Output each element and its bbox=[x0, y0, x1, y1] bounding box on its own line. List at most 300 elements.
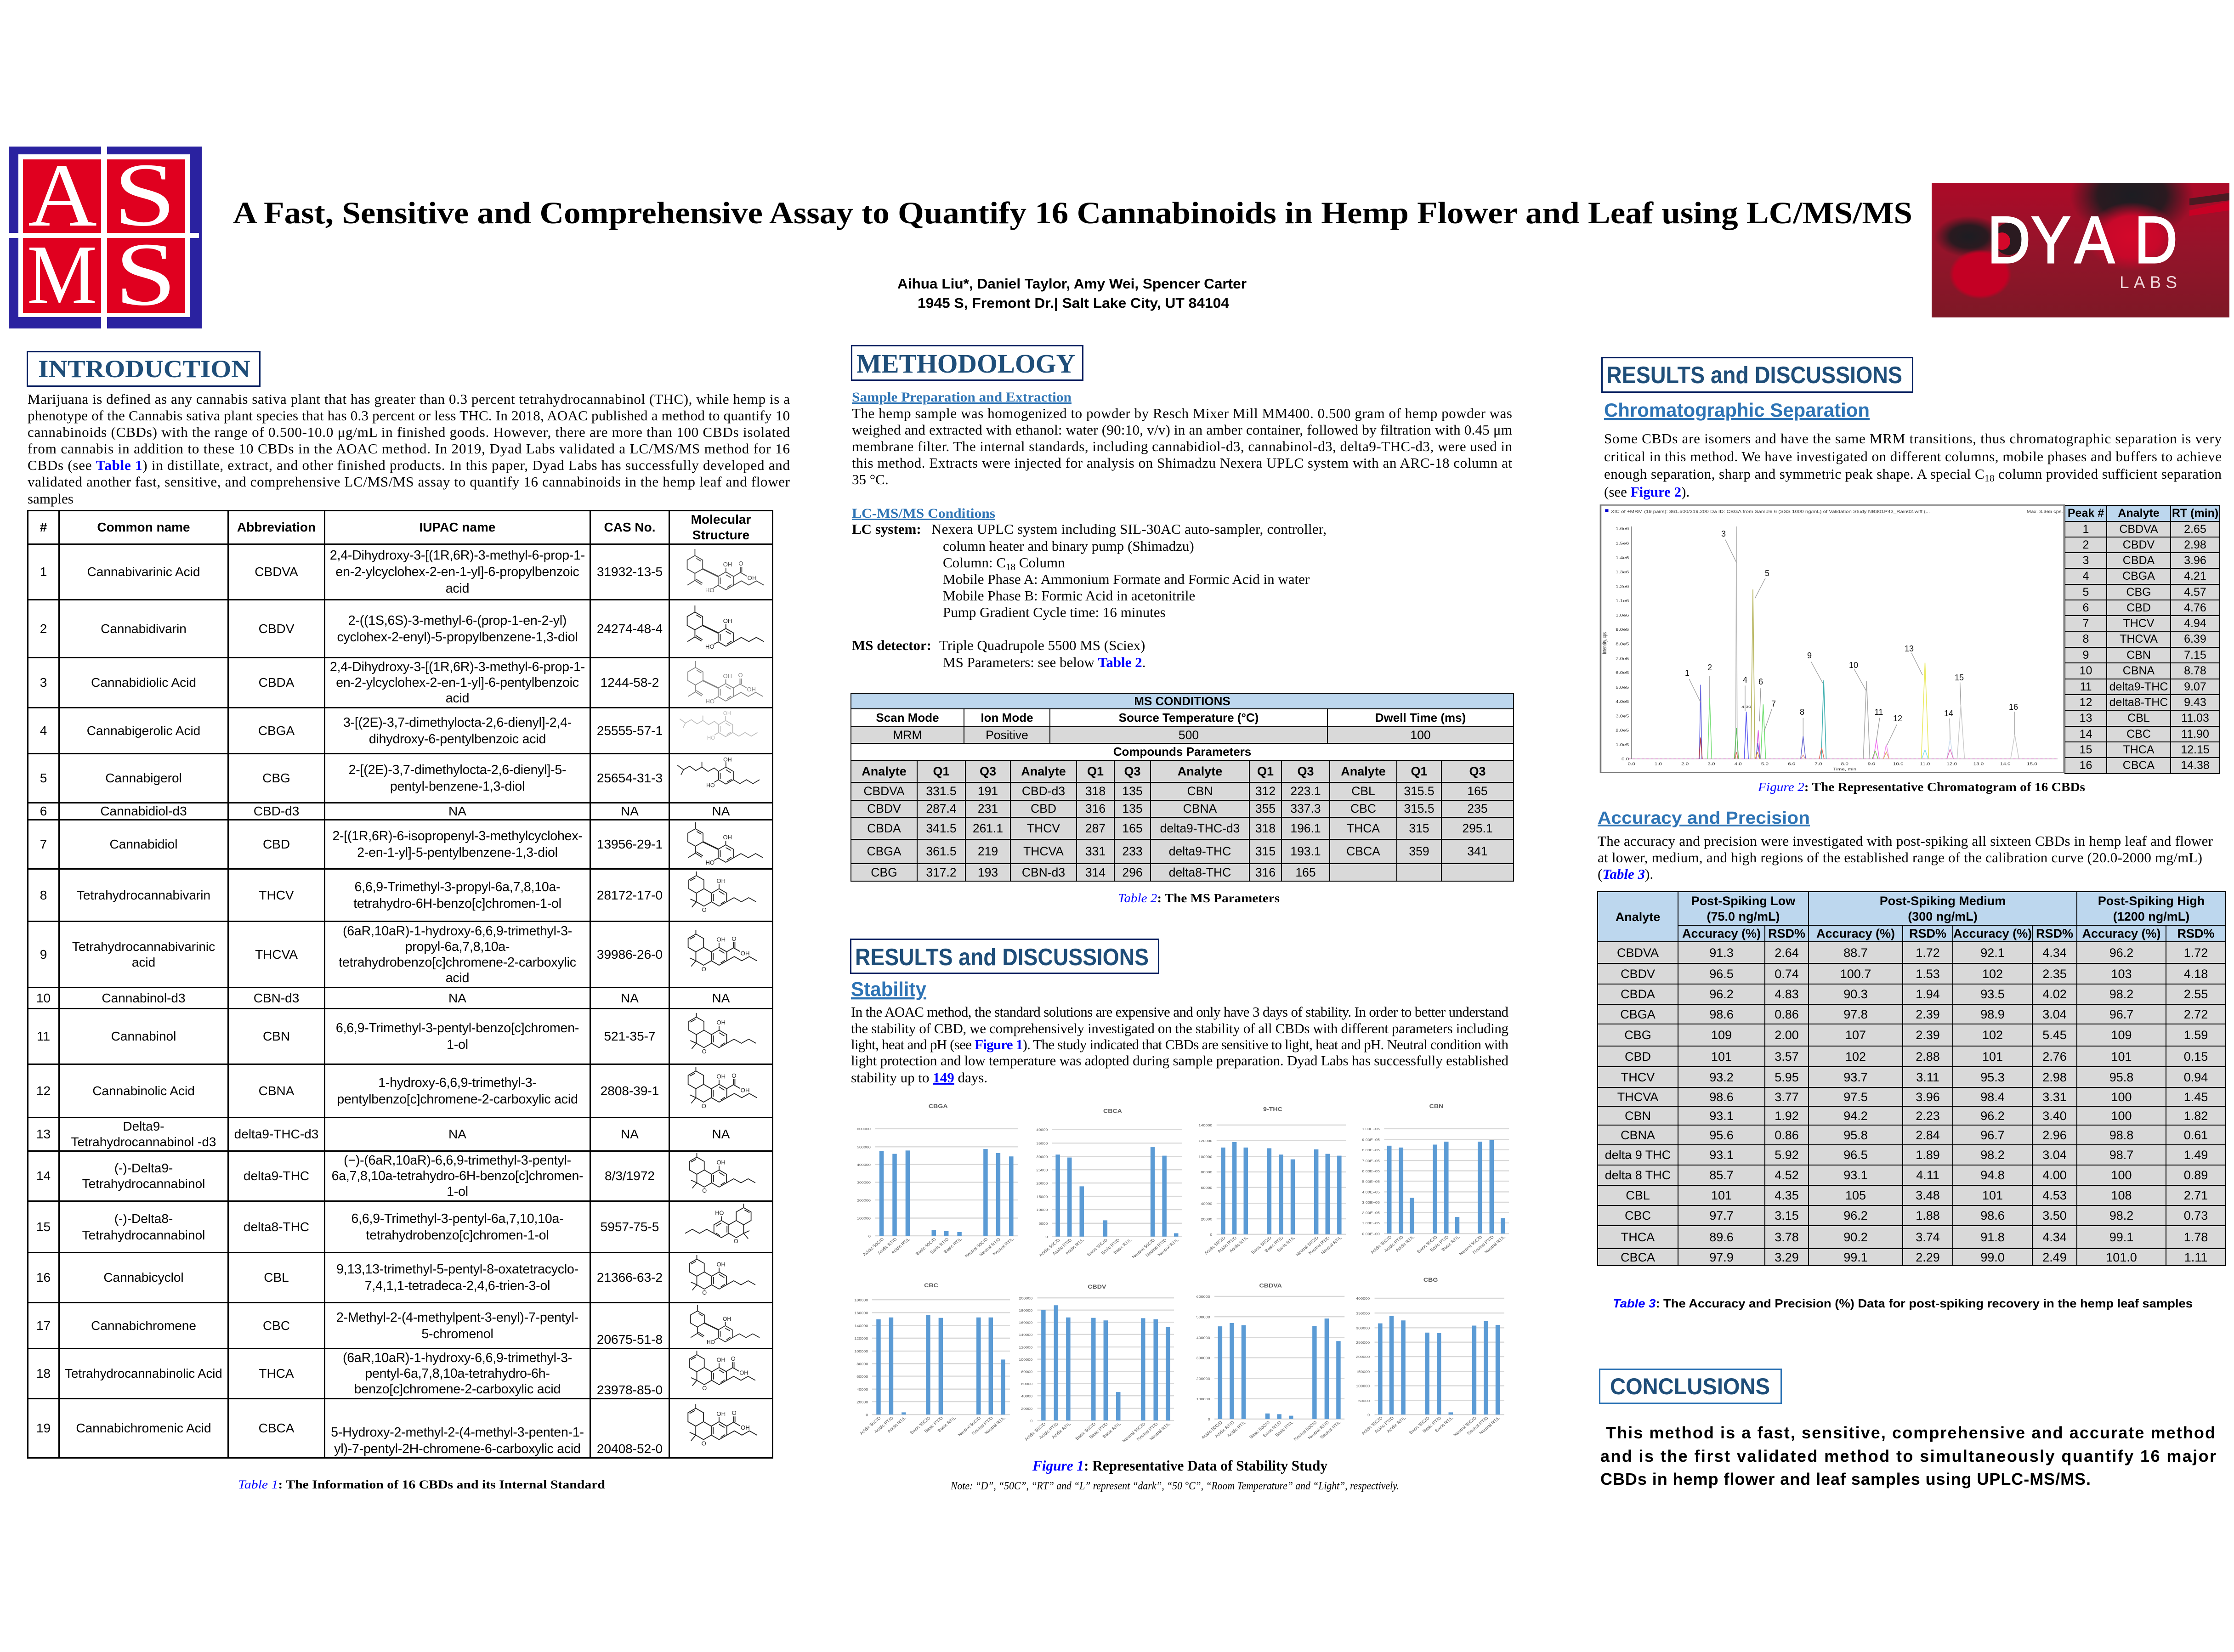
table 3: accuracy and precision: 98.8 bbox=[2109, 1128, 2133, 1142]
table: peak list: 11.03 bbox=[2181, 712, 2209, 724]
peak number labels: 5 bbox=[1765, 569, 1769, 578]
bar chart: CBDV: 160000 bbox=[1019, 1320, 1033, 1324]
bar chart: CBC: Basic RT/D bbox=[924, 1416, 944, 1434]
bar chart: CBDV: Neutral RT/L bbox=[1149, 1422, 1172, 1441]
table 3: accuracy and precision: 105 bbox=[1845, 1188, 1866, 1202]
peak number labels: 2 bbox=[1707, 663, 1712, 672]
table 1: cannabinoid information: 25555-57-1 bbox=[597, 723, 663, 738]
table 2: MS parameters: CBN bbox=[1187, 784, 1213, 798]
table 1: cannabinoid information: CBD bbox=[263, 837, 290, 851]
table 1: cannabinoid information: tetrahydro-6H-benzo[c]chromen-1-ol bbox=[353, 896, 561, 911]
subheading: Chromatographic Separation: Chromatographic Separation bbox=[1604, 399, 1870, 421]
bar chart: CBGA: 600000 bbox=[857, 1127, 871, 1131]
table 3: accuracy and precision: 0.15 bbox=[2184, 1049, 2208, 1063]
table 3: accuracy and precision: 2.00 bbox=[1775, 1028, 1799, 1042]
table 3: accuracy and precision: 2.71 bbox=[2184, 1188, 2208, 1202]
text block: accuracy and precision: The accuracy and precision were investigated with post-spiking all sixteen CBDs in hemp leaf and flower bbox=[1598, 833, 2213, 849]
bar chart: 9-THC: 0 bbox=[1210, 1233, 1213, 1237]
table 3: accuracy and precision: 93.2 bbox=[1709, 1070, 1734, 1084]
table: peak list: 4.57 bbox=[2184, 585, 2206, 598]
text block: LC and MS conditions: MS Parameters: see below Table 2. bbox=[943, 654, 1145, 670]
bar chart: CBDVA: 100000 bbox=[1196, 1397, 1210, 1401]
subheading: sample preparation: Sample Preparation and Extraction bbox=[852, 390, 1072, 405]
peak number labels: 1 bbox=[1685, 668, 1690, 678]
table 3: accuracy and precision: 1.49 bbox=[2184, 1148, 2208, 1162]
table 1: cannabinoid information: CBCA bbox=[259, 1421, 294, 1435]
bar chart: CBGA: Acidic 50C/D bbox=[862, 1237, 885, 1257]
text block: accuracy and precision: at lower, medium, and high regions of the established range of the calibration curve (20.0-2000 mg/mL) bbox=[1598, 849, 2202, 866]
bar chart: 9-THC: Neutral RT/L bbox=[1320, 1235, 1343, 1255]
table 2: MS parameters: MS CONDITIONS bbox=[1134, 694, 1230, 707]
table: peak list: delta8-THC bbox=[2109, 696, 2168, 708]
table 3: accuracy and precision: 0.86 bbox=[1775, 1007, 1799, 1021]
caption: table 2: Table 2: The MS Parameters bbox=[1118, 891, 1280, 905]
icon: molecule CBDVA bbox=[687, 549, 764, 594]
peak number labels: 3 bbox=[1721, 529, 1726, 538]
table 3: accuracy and precision: 95.3 bbox=[1980, 1070, 2005, 1084]
table 1: cannabinoid information: Tetrahydrocannabinol bbox=[82, 1177, 205, 1191]
x axis tick labels bbox=[1602, 632, 2037, 771]
x axis tick labels: Time, min bbox=[1833, 767, 1856, 771]
bar chart: CBCA: Acidic 50C/D bbox=[1038, 1238, 1061, 1258]
bar chart: CBDV: 140000 bbox=[1019, 1333, 1033, 1337]
table 2: MS parameters: CBDVA bbox=[863, 784, 905, 798]
table 1: cannabinoid information: 2-[(1R,6R)-6-isopropenyl-3-methylcyclohex- bbox=[332, 829, 583, 843]
table 3: accuracy and precision: 98.2 bbox=[2109, 987, 2133, 1001]
bar chart: CBCA: Neutral RT/D bbox=[1145, 1238, 1168, 1258]
bar chart: 9-THC: 100000 bbox=[1198, 1154, 1213, 1159]
table: peak list: 12 bbox=[2080, 696, 2092, 708]
text block: chromatographic separation: column provided sufficient separation bbox=[1995, 466, 2222, 482]
table 1: cannabinoid information: 23978-85-0 bbox=[597, 1383, 663, 1397]
table 3: accuracy and precision: 3.77 bbox=[1775, 1090, 1799, 1103]
authors and affiliation: Aihua Liu*, Daniel Taylor, Amy Wei, Spencer Carter bbox=[897, 276, 1247, 292]
table 2: MS parameters: 341 bbox=[1467, 844, 1488, 858]
table 1: cannabinoid information: tetrahydrobenzo[c]chromen-1-ol bbox=[366, 1228, 549, 1242]
table 2: MS parameters: THCVA bbox=[1023, 844, 1064, 858]
table 2: MS parameters: CBN-d3 bbox=[1022, 866, 1065, 879]
table: peak list: CBCA bbox=[2123, 759, 2155, 772]
table 3: accuracy and precision: 1.72 bbox=[1916, 945, 1940, 959]
table 1: cannabinoid information: 2808-39-1 bbox=[601, 1083, 659, 1098]
bar chart: CBN: 3.00E+05 bbox=[1362, 1200, 1380, 1205]
heading: Conclusions: CONCLUSIONS bbox=[1610, 1374, 1770, 1399]
icon: molecule CBC bbox=[691, 1305, 760, 1345]
table 2: MS parameters: 314 bbox=[1085, 866, 1106, 879]
bar chart: CBDVA: 400000 bbox=[1196, 1335, 1210, 1340]
heading: Introduction bbox=[28, 352, 260, 386]
bar chart: CBDV: 0 bbox=[1030, 1419, 1033, 1423]
table 3: accuracy and precision: 98.7 bbox=[2109, 1148, 2133, 1162]
table: peak list: 4 bbox=[2083, 570, 2089, 583]
table 2: MS parameters: MRM bbox=[893, 728, 922, 741]
table 3: accuracy and precision: 5.92 bbox=[1775, 1148, 1799, 1162]
icon: molecule delta9-THC bbox=[689, 1153, 755, 1194]
bar chart: CBG: 100000 bbox=[1356, 1384, 1370, 1388]
icon: molecule THCA bbox=[689, 1351, 755, 1392]
x axis tick labels: 6.0 bbox=[1788, 762, 1796, 766]
bar chart: CBC: Neutral RT/L bbox=[984, 1416, 1007, 1436]
table 3: accuracy and precision: 93.1 bbox=[1709, 1109, 1734, 1123]
bar chart: CBGA: Acidic RT/D bbox=[877, 1237, 898, 1256]
table 1: cannabinoid information: CBGA bbox=[258, 723, 295, 738]
table: peak list: 13 bbox=[2080, 712, 2092, 724]
table 3: accuracy and precision: 3.40 bbox=[2042, 1109, 2067, 1123]
table 1: cannabinoid information: Cannabichromenic Acid bbox=[76, 1421, 211, 1435]
table 1: cannabinoid information: 2-Methyl-2-(4-methylpent-3-enyl)-7-pentyl- bbox=[336, 1310, 578, 1325]
table: peak list: 3 bbox=[2083, 554, 2089, 567]
table 3: accuracy and precision: 95.8 bbox=[2109, 1070, 2133, 1084]
table 1: cannabinoid information: pentylbenzo[c]chromene-2-carboxylic acid bbox=[337, 1092, 578, 1106]
table 3: accuracy and precision: 102 bbox=[1982, 967, 2003, 980]
table 3: accuracy and precision: 2.72 bbox=[2184, 1007, 2208, 1021]
y axis tick labels: 1.0e5 bbox=[1616, 743, 1629, 747]
bar chart: 9-THC: Acidic RT/D bbox=[1216, 1236, 1238, 1254]
table 2: MS parameters: Analyte bbox=[1341, 764, 1386, 778]
table 2: MS parameters: 316 bbox=[1255, 866, 1276, 879]
bar chart: CBC: 120000 bbox=[854, 1336, 868, 1341]
bar chart: CBCA bbox=[1036, 1108, 1182, 1259]
table: peak list: 8 bbox=[2083, 633, 2089, 645]
table: peak list: 12.15 bbox=[2181, 743, 2210, 756]
table 2: MS parameters: 315.5 bbox=[1404, 784, 1435, 798]
bar chart: CBG: 150000 bbox=[1356, 1369, 1370, 1374]
table: peak list: THCV bbox=[2123, 617, 2155, 629]
table 1: cannabinoid information: CBD-d3 bbox=[254, 804, 299, 818]
bar chart: CBN: 6.00E+05 bbox=[1362, 1169, 1380, 1173]
table 2: MS parameters: CBC bbox=[1350, 802, 1376, 815]
table 1: cannabinoid information: NA bbox=[448, 804, 466, 818]
bar chart: CBDV: 100000 bbox=[1019, 1358, 1033, 1362]
table 1: cannabinoid information: delta8-THC bbox=[244, 1219, 309, 1234]
bar chart: CBCA: Basic RT/D bbox=[1100, 1238, 1121, 1256]
x axis tick labels: 11.0 bbox=[1920, 762, 1930, 766]
table 2: MS parameters: Analyte bbox=[862, 764, 907, 778]
table 2: MS parameters: CBNA bbox=[1183, 802, 1217, 815]
bar chart: CBDVA: Acidic RT/D bbox=[1214, 1420, 1236, 1439]
table 1: cannabinoid information: CBG bbox=[262, 771, 290, 785]
table 2: MS parameters: CBDV bbox=[867, 802, 901, 815]
bar chart: CBGA: 0 bbox=[868, 1234, 871, 1238]
peak number labels bbox=[1685, 529, 2018, 723]
table: peak list: CBGA bbox=[2122, 570, 2155, 583]
table 1: cannabinoid information: pentyl-6a,7,8,10a-tetrahydro-6h- bbox=[365, 1366, 550, 1381]
table 1: cannabinoid information: CBN bbox=[263, 1029, 290, 1043]
bar chart: CBN: Acidic RT/D bbox=[1383, 1235, 1405, 1253]
peak number labels: 8 bbox=[1800, 707, 1804, 717]
table 3: accuracy and precision: 102 bbox=[1982, 1028, 2003, 1042]
table 3: accuracy and precision: 1.94 bbox=[1916, 987, 1940, 1001]
table 3: accuracy and precision: 4.52 bbox=[1775, 1168, 1799, 1182]
table 1: cannabinoid information: 5 bbox=[40, 771, 47, 785]
table 3: accuracy and precision: CBD bbox=[1625, 1049, 1651, 1063]
table 1: cannabinoid information: 9 bbox=[40, 947, 47, 961]
table 3: accuracy and precision: 4.83 bbox=[1775, 987, 1799, 1001]
table 1: cannabinoid information: 2,4-Dihydroxy-3-[(1R,6R)-3-methyl-6-prop-1- bbox=[330, 660, 585, 674]
text block: LC and MS conditions: Column bbox=[1015, 554, 1065, 571]
table: peak list: 10 bbox=[2080, 664, 2092, 677]
bar chart: CBC: 0 bbox=[866, 1413, 868, 1417]
text block: conclusions: This method is a fast, sensitive, comprehensive and accurate method bbox=[1606, 1423, 2215, 1442]
table 1: cannabinoid information: 24274-48-4 bbox=[597, 621, 663, 636]
table 1: cannabinoid information: THCV bbox=[259, 888, 294, 902]
bar chart: CBDV: Neutral RT/D bbox=[1136, 1422, 1159, 1442]
peak number labels: 12 bbox=[1893, 714, 1902, 723]
table: peak list: CBG bbox=[2126, 585, 2151, 598]
table 3: accuracy and precision: 96.5 bbox=[1843, 1148, 1868, 1162]
bar chart: CBGA: Basic RT/D bbox=[929, 1237, 950, 1255]
table 1: cannabinoid information: Structure bbox=[692, 528, 749, 542]
table 1: cannabinoid information: 25654-31-3 bbox=[597, 771, 663, 785]
table 3: accuracy and precision: 108 bbox=[2111, 1188, 2132, 1202]
table 3: accuracy and precision: 97.7 bbox=[1709, 1209, 1734, 1222]
bar chart: CBGA: Acidic RT/L bbox=[890, 1237, 912, 1255]
icon: molecule CBNA bbox=[688, 1067, 757, 1109]
table 3: accuracy and precision: 96.7 bbox=[2109, 1007, 2133, 1021]
table 3: accuracy and precision: CBL bbox=[1626, 1188, 1650, 1202]
table: peak list: 4.21 bbox=[2184, 570, 2206, 583]
table 2: MS parameters: Q3 bbox=[1469, 764, 1486, 778]
table 3: accuracy and precision: 94.8 bbox=[1980, 1168, 2005, 1182]
bar chart: CBDV: Basic RT/L bbox=[1101, 1422, 1122, 1439]
table 3: accuracy and precision: 0.74 bbox=[1775, 967, 1799, 980]
bar chart: CBDVA: Acidic 50C/D bbox=[1200, 1420, 1224, 1440]
table: peak list: THCA bbox=[2123, 743, 2155, 756]
table 1: cannabinoid information: 21366-63-2 bbox=[597, 1270, 663, 1284]
text block: introduction: from cannabis in addition to these 10 CBDs in the AOAC method. In 2019, Dyad Labs validated a LC/MS/MS method for 16 bbox=[28, 441, 790, 457]
table 1: cannabinoid information: 2 bbox=[40, 621, 47, 636]
bar chart: CBGA: 500000 bbox=[857, 1145, 871, 1149]
table 3: accuracy and precision: 101 bbox=[1982, 1049, 2003, 1063]
table 3: accuracy and precision: 2.39 bbox=[1916, 1028, 1940, 1042]
table: peak list: CBDV bbox=[2123, 538, 2155, 551]
y axis tick labels: 7.0e5 bbox=[1616, 657, 1629, 661]
table 1: cannabinoid information: CBN-d3 bbox=[254, 990, 299, 1005]
table 3: accuracy and precision: 4.11 bbox=[1916, 1168, 1939, 1182]
table 3: accuracy and precision: Accuracy (%) bbox=[1816, 927, 1895, 940]
caption: figure 2: Figure 2 : The Representative Chromatogram of 16 CBDs bbox=[1758, 780, 2085, 794]
table 1: cannabinoid information: 13 bbox=[36, 1127, 51, 1141]
bar chart: CBDV: Acidic RT/D bbox=[1038, 1422, 1060, 1440]
table: peak list: 14 bbox=[2080, 728, 2092, 741]
bar chart: 9-THC bbox=[1198, 1106, 1346, 1257]
text block: LC and MS conditions: Nexera UPLC system including SIL-30AC auto-sampler, controller, bbox=[931, 521, 1327, 537]
table 3: accuracy and precision: 101 bbox=[1711, 1049, 1732, 1063]
table 3: accuracy and precision: RSD% bbox=[1768, 927, 1805, 940]
table 2: MS parameters: Analyte bbox=[1021, 764, 1066, 778]
table 2: MS parameters: 312 bbox=[1255, 784, 1276, 798]
table 3: accuracy and precision: 0.89 bbox=[2184, 1168, 2208, 1182]
table 3: accuracy and precision: CBDV bbox=[1621, 967, 1655, 980]
text block: conclusions: CBDs in hemp flower and leaf samples using UPLC-MS/MS. bbox=[1600, 1470, 2091, 1488]
table 3: accuracy and precision: 2.49 bbox=[2042, 1250, 2067, 1264]
table 3: accuracy and precision: 4.53 bbox=[2042, 1188, 2067, 1202]
table 1: cannabinoid information: 20408-52-0 bbox=[597, 1442, 663, 1456]
table 2: MS parameters: 318 bbox=[1255, 821, 1276, 835]
bar chart: CBCA: 35000 bbox=[1036, 1141, 1048, 1145]
table 3: accuracy and precision: 4.34 bbox=[2042, 945, 2067, 959]
bar chart: CBGA: CBGA bbox=[929, 1103, 948, 1109]
y axis tick labels: 1.5e6 bbox=[1616, 542, 1629, 546]
table 1: cannabinoid information: 14 bbox=[36, 1169, 51, 1183]
table 3: accuracy and precision: 98.2 bbox=[2109, 1209, 2133, 1222]
table 2: MS parameters: CBDA bbox=[867, 821, 901, 835]
icon: molecule CBCA bbox=[688, 1404, 757, 1447]
authors and affiliation: 1945 S, Fremont Dr.| Salt Lake City, UT 84104 bbox=[918, 295, 1230, 311]
table 3: accuracy and precision: RSD% bbox=[2177, 927, 2215, 940]
bar chart: CBCA: 30000 bbox=[1036, 1154, 1048, 1159]
table 3: accuracy and precision: 100 bbox=[2111, 1090, 2132, 1103]
figure 2: chromatogram: XIC of +MRM (19 pairs): 361.500/219.200 Da ID: CBGA from Sample 6 (SSS 1000 ng/mL) of Validation Study NB301P42_Rain02.wiff (... bbox=[1611, 509, 1930, 514]
bar chart: CBGA: Basic RT/L bbox=[943, 1237, 964, 1255]
text block: chromatographic separation: (see Figure 2). bbox=[1604, 484, 1690, 500]
bar chart: 9-THC: 60000 bbox=[1201, 1186, 1213, 1190]
bar chart: CBN: Neutral RT/D bbox=[1472, 1235, 1495, 1255]
bar chart: CBDV: Neutral 50C/D bbox=[1122, 1422, 1147, 1443]
table 3: accuracy and precision: 2.23 bbox=[1916, 1109, 1940, 1123]
table 3: accuracy and precision: 109 bbox=[1711, 1028, 1732, 1042]
table 1: cannabinoid information: 7,4,1,1-tetradeca-2,4,6-trien-3-ol bbox=[365, 1279, 550, 1293]
table 1: cannabinoid information: (−)-(6aR,10aR)-6,6,9-trimethyl-3-pentyl- bbox=[344, 1153, 571, 1168]
table 1: cannabinoid information: en-2-ylcyclohex-2-en-1-yl]-6-pentylbenzoic bbox=[336, 675, 579, 690]
logo: Dyad Labs: LABS bbox=[2120, 273, 2177, 292]
text block: introduction: phenotype of the Cannabis sativa plant species that has 0.3 percent or less THC. In 2018, AOAC published a method to quantify 10 bbox=[28, 407, 790, 424]
table 3: accuracy and precision: 101 bbox=[2111, 1049, 2132, 1063]
table 2: MS parameters: 315 bbox=[1255, 844, 1276, 858]
bar chart: CBCA: 10000 bbox=[1036, 1208, 1048, 1212]
bar chart: CBDVA: Basic 50C/D bbox=[1248, 1420, 1271, 1440]
icon: molecule CBDA bbox=[688, 661, 763, 705]
caption: table 1: Table 1 : The Information of 16 CBDs and its Internal Standard bbox=[238, 1478, 606, 1491]
table 3: accuracy and precision: 96.2 bbox=[2109, 945, 2133, 959]
table 2: MS parameters: Scan Mode bbox=[876, 711, 939, 724]
table: peak list: CBD bbox=[2126, 601, 2151, 614]
bar chart: 9-THC: Neutral RT/D bbox=[1308, 1236, 1331, 1256]
table 2: MS parameters: 219 bbox=[978, 844, 998, 858]
table 3: accuracy and precision: 96.2 bbox=[1709, 987, 1734, 1001]
bar chart: CBN: Basic RT/D bbox=[1429, 1235, 1450, 1253]
bar chart: CBG: 200000 bbox=[1356, 1355, 1370, 1359]
table 1: cannabinoid information: Cannabidiol bbox=[110, 837, 177, 851]
table 1: cannabinoid information: Cannabidiolic Acid bbox=[91, 675, 196, 690]
icon: molecule CBGA bbox=[680, 711, 757, 741]
bar chart: CBC: 80000 bbox=[856, 1362, 868, 1366]
bar chart: CBDV: CBDV bbox=[1088, 1284, 1106, 1290]
table 1: cannabinoid information: Tetrahydrocannabivarin bbox=[77, 888, 210, 902]
table 3: accuracy and precision: 0.73 bbox=[2184, 1209, 2208, 1222]
x axis tick labels: 1.0 bbox=[1655, 762, 1662, 766]
text block: stability: light protection and low temperature was adopted during sample preparation. Dyad Labs has successfully established bbox=[851, 1052, 1509, 1069]
y axis tick labels: 6.0e5 bbox=[1616, 671, 1629, 675]
heading: Introduction: INTRODUCTION bbox=[38, 355, 250, 383]
bar chart: CBC: 20000 bbox=[856, 1400, 868, 1404]
bar chart: CBDVA: Neutral RT/L bbox=[1319, 1420, 1342, 1440]
peak number labels: 9 bbox=[1807, 651, 1812, 660]
logo: ASMS: A bbox=[28, 145, 97, 245]
table 3: accuracy and precision: Post-Spiking Low bbox=[1691, 894, 1795, 908]
text block: introduction: cannabinoids (CBDs) with the range of 0.500-10.0 μg/mL in finished goods. However, there are more than 100 CBDs isolated bbox=[28, 424, 790, 440]
table 1: cannabinoid information: 11 bbox=[37, 1029, 50, 1043]
table 2: MS parameters: 331.5 bbox=[926, 784, 957, 798]
table 2: MS parameters: 355 bbox=[1255, 802, 1276, 815]
table 2: MS parameters: Q3 bbox=[1124, 764, 1141, 778]
bar chart: CBCA: 0 bbox=[1045, 1235, 1048, 1239]
table: peak list: delta9-THC bbox=[2109, 680, 2168, 693]
bar chart: CBDV: 60000 bbox=[1021, 1382, 1033, 1386]
table 1: cannabinoid information: acid bbox=[132, 955, 155, 969]
table 1: cannabinoid information: 17 bbox=[36, 1318, 51, 1332]
table 1: cannabinoid information: 6a,7,8,10a-tetrahydro-6H-benzo[c]chromen- bbox=[332, 1169, 583, 1183]
bar chart: CBDV: 120000 bbox=[1019, 1345, 1033, 1349]
table 2: MS parameters: delta9-THC-d3 bbox=[1160, 821, 1240, 835]
peak number labels: 13 bbox=[1905, 644, 1914, 653]
table 3: accuracy and precision: 3.11 bbox=[1916, 1070, 1939, 1084]
bar chart: CBCA: Acidic RT/L bbox=[1064, 1238, 1086, 1256]
bar chart: CBCA: Neutral RT/L bbox=[1157, 1238, 1180, 1257]
table 2: MS parameters bbox=[851, 693, 1513, 881]
x axis tick labels: 9.0 bbox=[1868, 762, 1876, 766]
bar chart: CBG: 400000 bbox=[1356, 1296, 1370, 1301]
table 1: cannabinoid information: Cannabinolic Acid bbox=[92, 1083, 195, 1098]
y axis tick labels bbox=[1616, 527, 1629, 762]
bar chart: CBCA: 25000 bbox=[1036, 1168, 1048, 1172]
table 2: MS parameters: 337.3 bbox=[1290, 802, 1321, 815]
bar chart: CBC: 100000 bbox=[854, 1349, 868, 1353]
table 1: cannabinoid information: 521-35-7 bbox=[604, 1029, 656, 1043]
table 3: accuracy and precision: 99.0 bbox=[1980, 1250, 2005, 1264]
subheading: Stability: Stability bbox=[851, 978, 926, 1001]
table 1: cannabinoid information: (-)-Delta9- bbox=[114, 1161, 173, 1175]
figure 2: chromatogram: 4.30 bbox=[1741, 705, 1751, 709]
table 1: cannabinoid information: 5-Hydroxy-2-methyl-2-(4-methyl-3-penten-1- bbox=[331, 1425, 584, 1440]
table 2: MS parameters: Q1 bbox=[1087, 764, 1104, 778]
table: peak list: 11 bbox=[2080, 680, 2092, 693]
peak number labels: 10 bbox=[1849, 661, 1858, 670]
text block: chromatographic separation: critical in this method. We have investigated on different columns, mobile phases and buffers to achieve bbox=[1604, 448, 2222, 464]
bar chart: CBDV: Acidic RT/L bbox=[1051, 1422, 1072, 1440]
bar chart: CBC: Acidic RT/L bbox=[886, 1416, 907, 1434]
table 1: cannabinoid information: NA bbox=[621, 1127, 639, 1141]
bar chart: CBDV: Basic RT/D bbox=[1089, 1422, 1109, 1440]
bar chart: CBDVA: Neutral RT/D bbox=[1307, 1420, 1330, 1440]
table 3: accuracy and precision: 97.9 bbox=[1709, 1250, 1734, 1264]
table 1: cannabinoid information: (6aR,10aR)-1-hydroxy-6,6,9-trimethyl-3- bbox=[343, 923, 572, 938]
bar chart: 9-THC: 120000 bbox=[1198, 1139, 1213, 1143]
bar chart: CBN: 8.00E+05 bbox=[1362, 1148, 1380, 1152]
table: peak list: 4.94 bbox=[2184, 617, 2206, 629]
table 3: accuracy and precision: Accuracy (%) bbox=[2082, 927, 2161, 940]
table 1: cannabinoid information: Tetrahydrocannabivarinic bbox=[72, 939, 215, 954]
table 2: MS parameters: THCV bbox=[1027, 821, 1060, 835]
bar chart: CBCA: Basic RT/L bbox=[1112, 1238, 1133, 1255]
table 3: accuracy and precision: 101 bbox=[1711, 1188, 1732, 1202]
table 3: accuracy and precision: Analyte bbox=[1616, 910, 1660, 923]
y axis tick labels: 3.0e5 bbox=[1616, 714, 1629, 719]
bar chart: CBDVA bbox=[1196, 1283, 1344, 1442]
table: peak list: 15 bbox=[2080, 743, 2092, 756]
table 1: cannabinoid information: Molecular bbox=[691, 512, 751, 526]
bar chart: CBC: Basic 50C/D bbox=[909, 1416, 932, 1435]
logo: ASMS: S bbox=[115, 224, 176, 324]
table 3: accuracy and precision: 3.04 bbox=[2042, 1148, 2067, 1162]
table 1: cannabinoid information: 1-hydroxy-6,6,9-trimethyl-3- bbox=[378, 1075, 537, 1090]
table: peak list: 5 bbox=[2083, 585, 2089, 598]
bar chart: 9-THC: Acidic RT/L bbox=[1228, 1235, 1250, 1254]
table 2: MS parameters: Analyte bbox=[1178, 764, 1222, 778]
bar chart: CBC: 60000 bbox=[856, 1374, 868, 1379]
table 2: MS parameters: Positive bbox=[986, 728, 1028, 741]
table 3: accuracy and precision: 4.02 bbox=[2042, 987, 2067, 1001]
